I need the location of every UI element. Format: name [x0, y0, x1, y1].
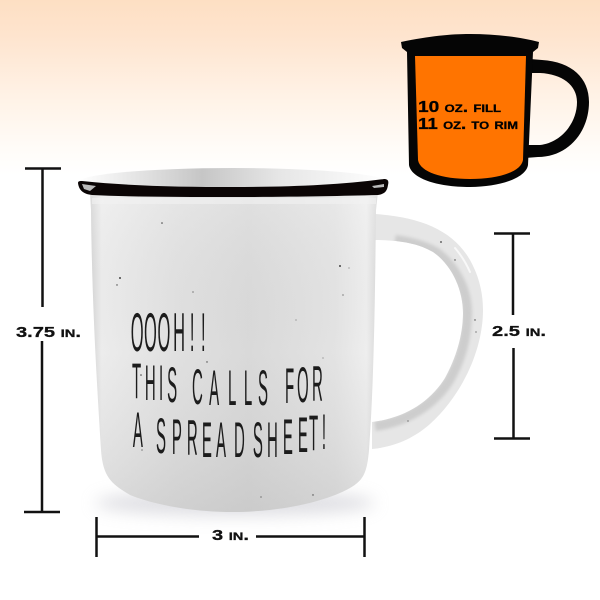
ground shadow: [95, 490, 375, 516]
capacity label: 10 oz. fill: [418, 99, 501, 116]
collar highlight: [92, 198, 376, 204]
icon: capacity mug: [401, 34, 589, 187]
rim inside: [79, 168, 387, 196]
handle highlight: [455, 248, 470, 272]
label: 3.75 in.: [16, 324, 81, 341]
line: A SPREADSHEET!: A SPREADSHEET!: [133, 402, 326, 468]
handle inner shade: [375, 240, 467, 426]
black rim band: [78, 179, 388, 197]
body shading: [90, 192, 378, 512]
line: THIS CALLS FOR: THIS CALLS FOR: [132, 353, 323, 416]
dimension: handle 2.5 in: [492, 234, 546, 438]
orange fill: [415, 56, 526, 179]
mug body: [90, 192, 378, 512]
speckles: [116, 222, 477, 498]
label: 2.5 in.: [492, 323, 546, 340]
mug slogan: [131, 301, 326, 468]
large mug photo: [78, 168, 483, 516]
capacity label: 11 oz. to rim: [418, 116, 518, 133]
label: 3 in.: [212, 527, 249, 544]
line: OOOH!!: OOOH!!: [131, 301, 206, 363]
small mug handle: [525, 59, 589, 158]
small mug body: [401, 34, 539, 187]
mug handle: [372, 214, 483, 449]
dimension: width 3 in: [96, 517, 364, 557]
capacity label: [418, 99, 518, 133]
dimension: height 3.75 in: [16, 168, 81, 512]
rim highlights: [82, 184, 384, 191]
